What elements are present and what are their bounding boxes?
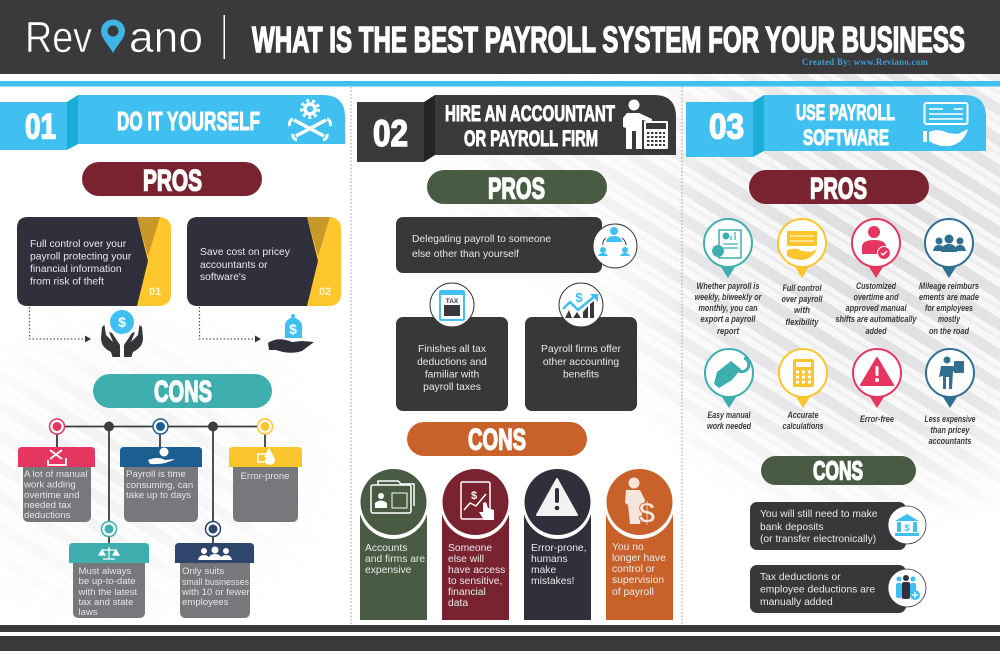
pro: less expensive: Less expensive <box>924 413 976 424</box>
con column: no control: $ <box>639 497 656 530</box>
con column: humans make mistakes: humans <box>531 554 568 565</box>
con column: sensitive data: have access <box>448 565 505 576</box>
pro card 02: software's <box>200 272 246 283</box>
con column: expensive <box>358 469 428 620</box>
con card: small businesses: employees <box>182 597 229 608</box>
con column: sensitive data: $ <box>471 490 477 502</box>
icon: bank <box>888 506 926 544</box>
con card: manual work: A lot of manual <box>24 469 87 480</box>
pro: less expensive: than pricey <box>930 424 970 435</box>
timeline <box>50 419 272 544</box>
pro: full control: over payroll <box>782 293 823 304</box>
pro: export report <box>694 219 763 336</box>
pro card: tax <box>396 283 508 411</box>
logo <box>25 13 203 62</box>
ribbon 02: OR PAYROLL FIRM <box>464 126 598 151</box>
pro card: delegating: else other than yourself <box>412 249 519 260</box>
con card: manual work: overtime and <box>24 490 79 501</box>
pro card 01: 01 <box>149 286 161 298</box>
con card: small businesses: Only suits <box>182 566 224 577</box>
cons heading <box>761 456 916 486</box>
logo: ano <box>129 13 203 62</box>
pro card 02 <box>187 217 341 306</box>
ribbon 02: 02 <box>373 113 408 154</box>
con card: time consuming: consuming, can <box>126 480 193 491</box>
pro: accurate calculations: calculations <box>782 420 824 431</box>
con column: expensive: and firms are <box>365 554 425 565</box>
pro: mileage: for employees <box>925 302 973 313</box>
pro card 02: 02 <box>319 286 331 298</box>
pro card 01: Full control over your <box>30 239 127 250</box>
pro: easy manual work: Easy manual <box>708 409 751 420</box>
pro: export report: monthly, you can <box>698 302 758 313</box>
logo: Rev <box>25 13 92 62</box>
pros heading: PROS <box>488 172 545 206</box>
icon: money bag on hand: $ <box>289 321 297 337</box>
cons heading: CONS <box>154 376 212 408</box>
con column: sensitive data: Someone <box>448 543 492 554</box>
pro: full control: Full control <box>782 282 822 293</box>
con card: bank deposits: You will still need to make <box>760 509 878 520</box>
pro: customized overtime: added <box>866 325 887 336</box>
pro: less expensive <box>924 349 976 446</box>
pro card: accounting benefits: benefits <box>563 370 599 380</box>
con card: bank deposits: bank deposits <box>760 522 824 533</box>
con card: small businesses: with 10 or fewer <box>181 587 251 598</box>
pro: full control <box>778 219 826 327</box>
con column: no control: of payroll <box>612 587 654 598</box>
column dividers <box>351 87 682 625</box>
pro: full control: with <box>794 304 810 315</box>
con card: time consuming <box>120 447 202 522</box>
panel: use payroll software <box>686 95 986 613</box>
pro: export report: report <box>717 325 740 336</box>
pro card: tax: familiar with <box>425 370 479 380</box>
con column: no control: control or <box>612 564 655 575</box>
icon: tax calendar: TAX <box>446 298 459 305</box>
con column: expensive: Accounts <box>365 543 407 554</box>
ribbon 03: USE PAYROLL <box>796 100 895 125</box>
pro: export report: weekly, biweekly or <box>694 291 763 302</box>
pro: customized overtime: approved manual <box>846 302 907 313</box>
ribbon 01: 01 <box>25 108 56 146</box>
con card: up to date: be up-to-date <box>78 576 136 587</box>
pros heading: PROS <box>810 172 867 206</box>
con card: deductions: employee deductions are <box>760 584 875 596</box>
con card: time consuming: take up to days <box>126 490 191 501</box>
pro card: tax: Finishes all tax <box>418 344 487 355</box>
icon: growth chart: $ <box>575 290 583 305</box>
con card: small businesses <box>175 543 254 618</box>
icon: bank: $ <box>904 523 910 533</box>
ribbon 03 <box>686 95 986 157</box>
icon: delegation <box>593 224 637 268</box>
con column: sensitive data: data <box>448 598 468 609</box>
background stripes <box>14 74 1000 543</box>
pro: export report: Whether payroll is <box>696 280 760 291</box>
con card: deductions: Tax deductions or <box>760 572 841 583</box>
con column: humans make mistakes <box>522 469 592 620</box>
pro card: accounting benefits: other accounting <box>543 357 619 368</box>
con card: manual work: work adding <box>23 480 76 490</box>
pro: mileage: mostly <box>938 313 961 324</box>
con column: sensitive data: to sensitive, <box>448 576 502 587</box>
pros heading <box>82 162 262 198</box>
pro card: tax: deductions and <box>417 357 487 368</box>
icon: money bag on hand <box>268 314 314 353</box>
pro: easy manual work: work needed <box>707 420 751 431</box>
con column: no control <box>604 469 674 620</box>
con column: humans make mistakes: make <box>531 565 556 576</box>
con card: up to date: Must always <box>78 566 131 577</box>
con card: manual work: needed tax <box>24 500 72 511</box>
pro card 01: from risk of theft <box>30 276 104 288</box>
pro: error free <box>853 349 901 424</box>
panel: hire an accountant <box>357 95 676 620</box>
pro card 01: financial information <box>30 264 122 275</box>
pro card 01: payroll protecting your <box>30 252 132 262</box>
panel: do it yourself <box>0 95 345 618</box>
con card: up to date: with the latest <box>78 587 137 598</box>
pro card: tax: payroll taxes <box>423 382 481 393</box>
icon: employees add <box>888 569 926 607</box>
pro: customized overtime: overtime and <box>854 291 899 302</box>
con card: bank deposits <box>750 502 926 550</box>
header bar <box>0 0 1000 86</box>
icon: hands and coin: $ <box>118 314 126 330</box>
con column: sensitive data: financial <box>448 587 486 598</box>
pro: accurate calculations: Accurate <box>787 409 818 420</box>
con card: up to date: tax and state <box>78 597 133 608</box>
pro card: delegating: Delegating payroll to someone <box>412 234 551 245</box>
pro card: accounting benefits: Payroll firms offer <box>541 344 622 355</box>
footer bars <box>0 625 1000 651</box>
pro: error free: Error-free <box>860 413 894 424</box>
ribbon 03: 03 <box>709 108 744 146</box>
icon: hands and coin <box>101 310 143 357</box>
con card: small businesses: small businesses <box>182 577 249 588</box>
con card: up to date <box>69 543 149 618</box>
pro: accurate calculations <box>779 349 827 431</box>
con column: humans make mistakes: mistakes! <box>531 576 574 587</box>
con column: sensitive data: else will <box>448 554 484 565</box>
con card: deductions: manually added <box>760 597 833 608</box>
con card: up to date: laws <box>78 607 98 618</box>
ribbon 01: DO IT YOURSELF <box>117 106 260 136</box>
icon: cheque on hand <box>923 103 968 146</box>
credit: Created By: www.Reviano.com <box>802 57 928 67</box>
pro: customized overtime <box>836 219 917 336</box>
ribbon 03: SOFTWARE <box>803 125 889 150</box>
pro: customized overtime: Customized <box>856 280 896 291</box>
con card: manual work <box>18 447 95 522</box>
con column: no control: supervision <box>612 575 664 586</box>
pro card 02: accountants or <box>200 260 268 271</box>
cons heading <box>93 374 272 408</box>
con card: bank deposits: (or transfer electronically) <box>760 534 876 545</box>
cons heading: CONS <box>468 424 526 456</box>
pro: full control: flexibility <box>786 316 819 327</box>
pro: export report: export a payroll <box>700 313 756 324</box>
cons heading: CONS <box>813 456 863 486</box>
con card: error prone: Error-prone <box>240 471 290 482</box>
cons heading <box>407 422 587 456</box>
pro card: accounting benefits <box>525 283 637 411</box>
pro: less expensive: accountants <box>928 435 972 446</box>
con card: manual work: deductions <box>24 510 71 521</box>
pro: customized overtime: shifts are automatically <box>836 313 917 324</box>
pro: mileage <box>919 219 979 336</box>
pro: mileage: ements are made <box>919 291 979 302</box>
icon: gear and wrenches <box>289 100 331 140</box>
con card: time consuming: Payroll is time <box>126 469 186 480</box>
pros heading <box>427 170 607 206</box>
con column: no control: longer have <box>612 553 666 564</box>
con column: expensive: expensive <box>365 565 412 576</box>
icon: accountant and calculator <box>623 100 668 149</box>
con column: no control: You no <box>612 542 644 553</box>
dotted arrows <box>30 307 255 339</box>
con card: error prone <box>229 447 302 522</box>
ribbon 01 <box>0 95 345 150</box>
con column: humans make mistakes: Error-prone, <box>531 543 587 554</box>
pro card 01 <box>17 217 171 306</box>
pro: mileage: Mileage reimburs <box>919 280 979 291</box>
con card: deductions <box>750 565 926 613</box>
pro card: delegating <box>396 217 637 273</box>
pro card 02: Save cost on pricey <box>200 247 291 258</box>
pros heading <box>749 170 929 206</box>
ribbon 02: HIRE AN ACCOUNTANT <box>445 101 615 126</box>
pros heading: PROS <box>143 164 202 198</box>
ribbon 02 <box>357 95 676 162</box>
pro: easy manual work <box>705 349 753 431</box>
pro: mileage: on the road <box>929 325 969 336</box>
con column: sensitive data <box>440 469 510 620</box>
